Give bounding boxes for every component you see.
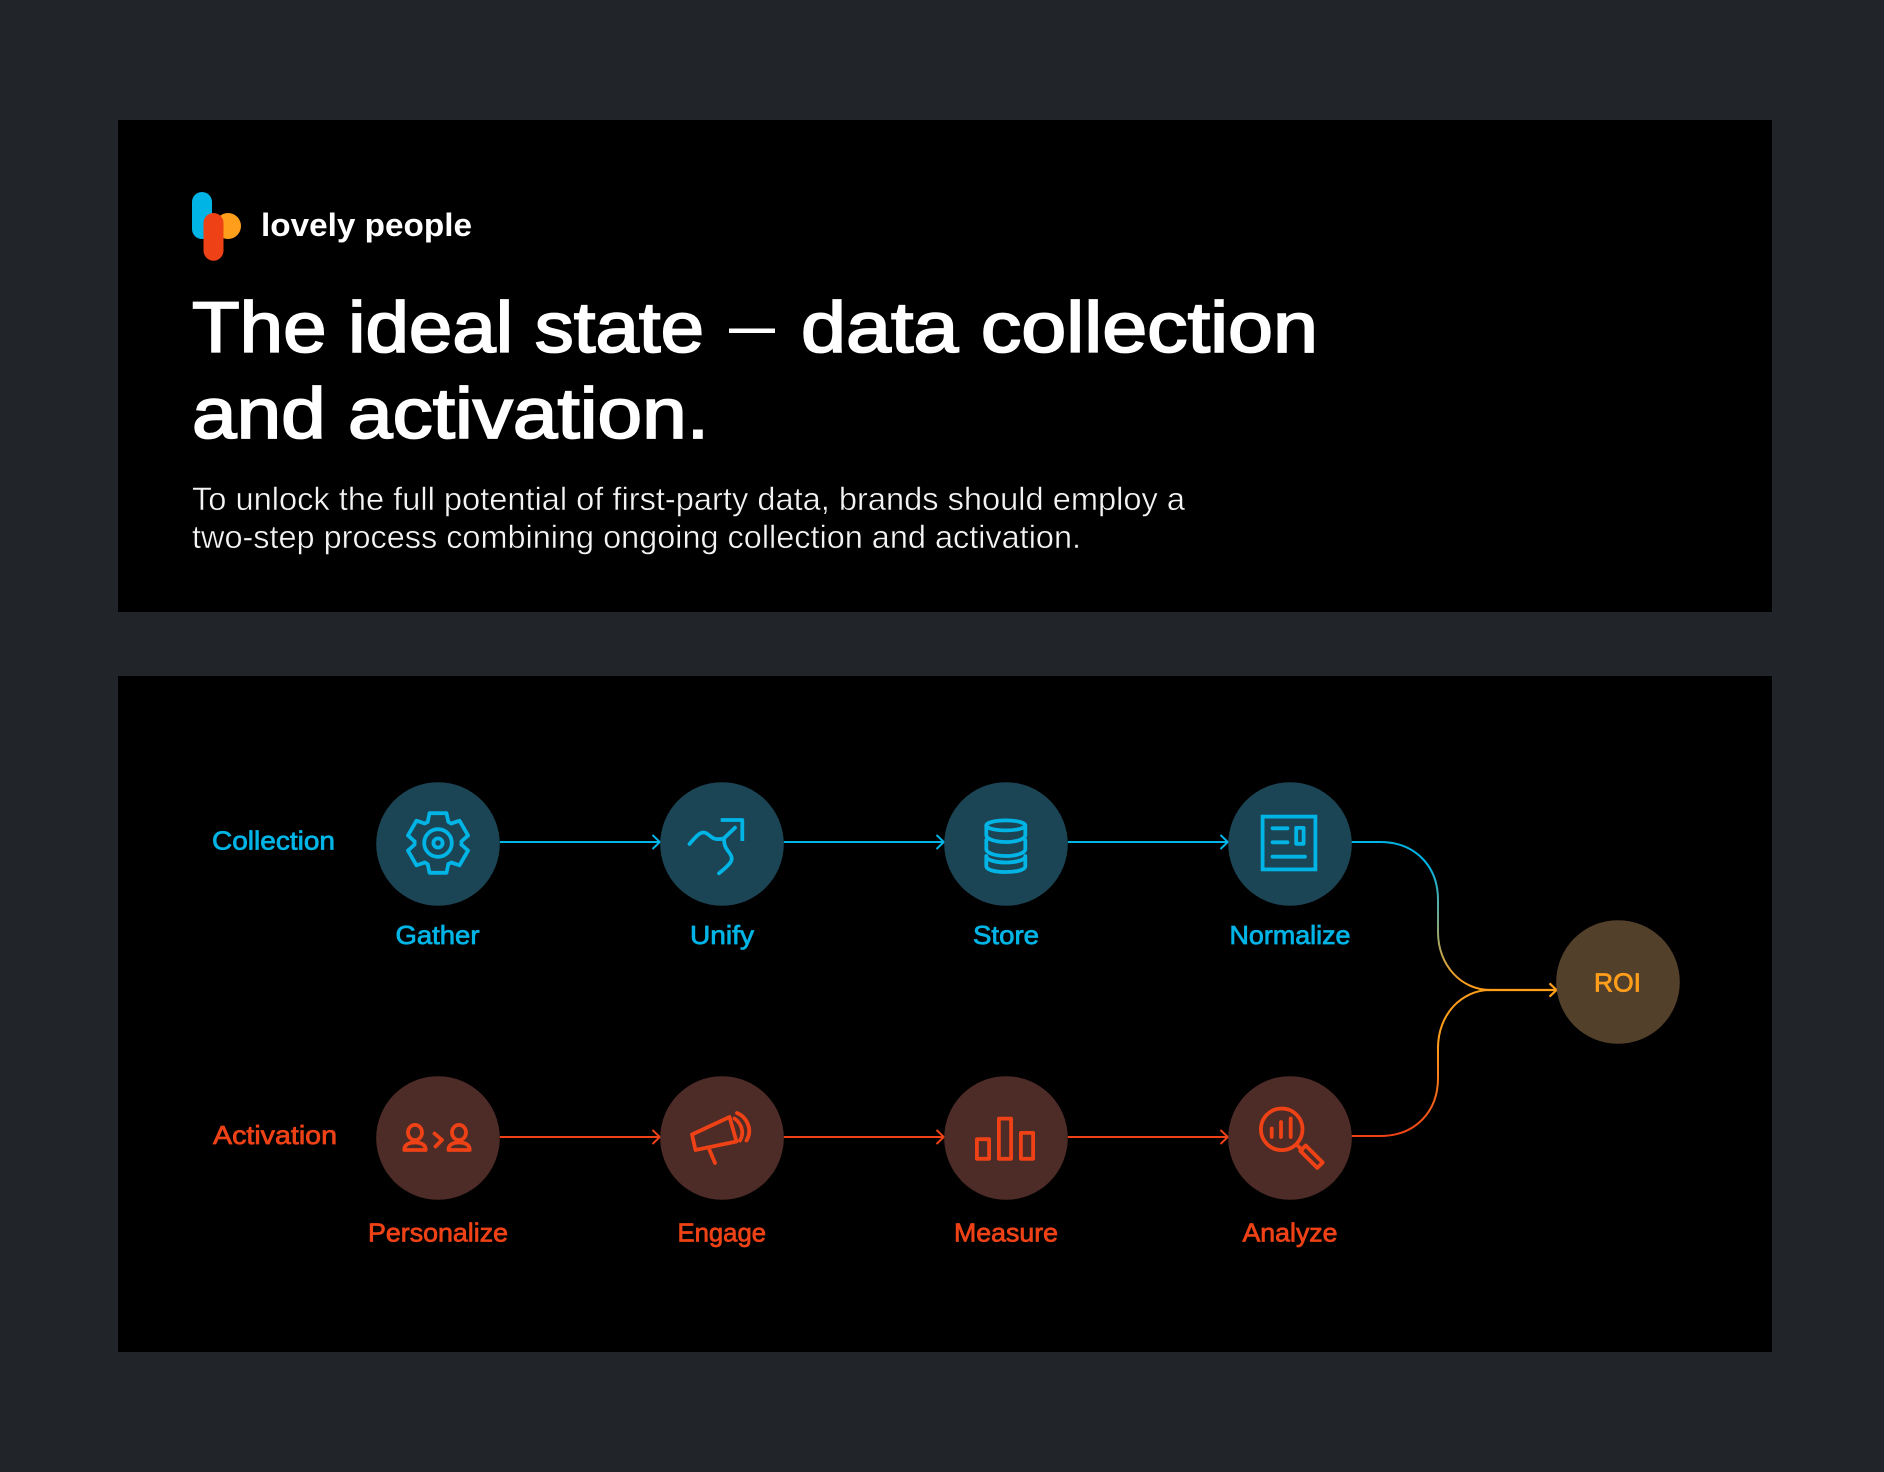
- arrow: Engage to Measure: [784, 1130, 944, 1144]
- icon: bar chart: [977, 1119, 1033, 1159]
- panel: header: [118, 120, 1772, 612]
- logo: lovely people: [192, 192, 472, 261]
- label: Normalize: Normalize: [1230, 920, 1350, 950]
- icon: gear: [406, 813, 470, 873]
- connector: Analyze to ROI: [1352, 990, 1490, 1136]
- connector: Normalize to ROI: [1352, 842, 1490, 990]
- label: Measure: Measure: [954, 1218, 1058, 1248]
- icon: database: [986, 820, 1025, 872]
- icon: merging paths: [690, 820, 742, 873]
- row label: Collection: Collection: [212, 826, 335, 856]
- step: Personalize: [368, 1076, 508, 1248]
- label: Store: Store: [973, 920, 1039, 950]
- icon: document layout: [1263, 817, 1315, 869]
- icon: megaphone: [692, 1113, 749, 1163]
- step: Gather: [376, 782, 500, 950]
- title: [192, 289, 1318, 454]
- node: ROI: ROI: [1594, 968, 1641, 998]
- icon: people with chevron: [404, 1125, 470, 1150]
- title: data collection: [801, 289, 1318, 368]
- arrow: Unify to Store: [784, 835, 944, 849]
- subtitle text: [192, 481, 1185, 555]
- arrow: Personalize to Engage: [500, 1130, 660, 1144]
- subtitle text: two-step process combining ongoing collection and activation.: [192, 519, 1081, 555]
- arrow: Measure to Analyze: [1068, 1130, 1228, 1144]
- arrow: Gather to Unify: [500, 835, 660, 849]
- label: Personalize: Personalize: [368, 1218, 508, 1248]
- title: and activation.: [192, 375, 709, 454]
- label: Unify: Unify: [690, 920, 754, 950]
- step: Store: [944, 782, 1068, 950]
- row label: Activation: Activation: [213, 1120, 337, 1150]
- step: Engage: [660, 1076, 784, 1248]
- step: Measure: [944, 1076, 1068, 1248]
- label: Analyze: Analyze: [1242, 1218, 1338, 1248]
- label: Engage: Engage: [678, 1218, 766, 1248]
- node: ROI: [1556, 920, 1680, 1044]
- label: Gather: Gather: [396, 920, 480, 950]
- logo: lovely people: lovely people: [261, 207, 472, 243]
- arrow: into ROI: [1488, 983, 1556, 997]
- step: Normalize: [1228, 782, 1352, 950]
- subtitle text: To unlock the full potential of first-party data, brands should employ a: [192, 481, 1185, 517]
- step: Unify: [660, 782, 784, 950]
- icon: magnifier with bars: [1261, 1108, 1323, 1168]
- arrow: Store to Normalize: [1068, 835, 1228, 849]
- title: The ideal state: [192, 289, 704, 368]
- step: Analyze: [1228, 1076, 1352, 1248]
- panel: process diagram: [118, 676, 1772, 1352]
